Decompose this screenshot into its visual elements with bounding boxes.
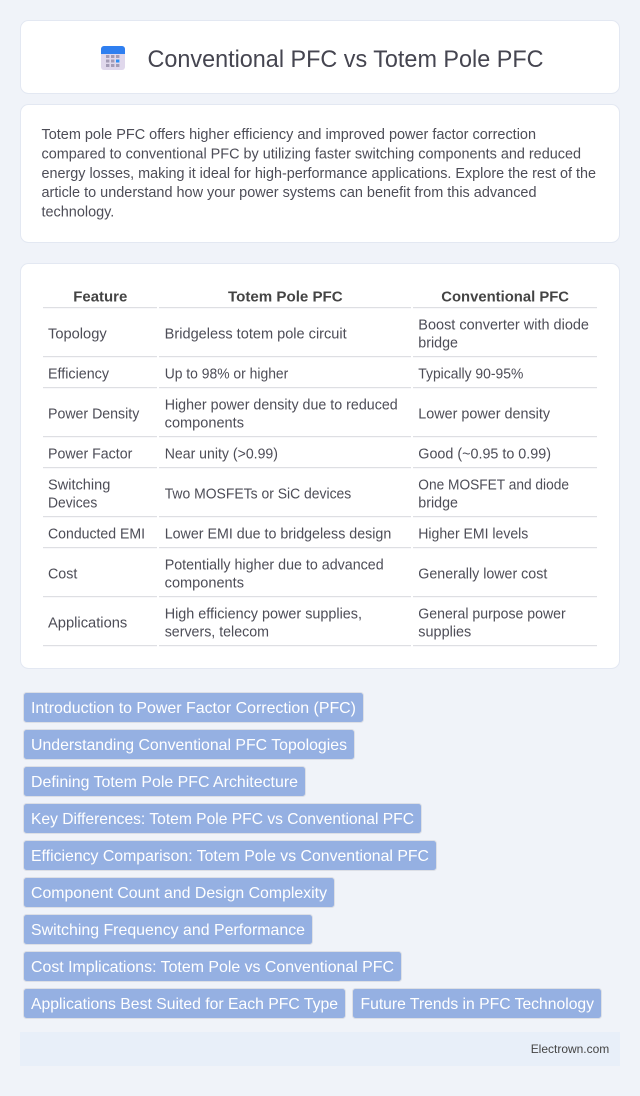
- row: power density: [48, 397, 551, 431]
- row: switching devices: Two MOSFETs or SiC devices: [165, 486, 351, 502]
- text block: introduction paragraph: compared to conventional PFC by utilizing faster switching components and reduced: [42, 146, 581, 162]
- icon: calendar grid: [101, 46, 125, 70]
- row: power factor: Near unity (>0.99): [165, 446, 278, 462]
- row: switching devices: [48, 477, 569, 511]
- tag: cost implications: [24, 952, 402, 982]
- row: conducted EMI: Conducted EMI: [48, 526, 145, 542]
- row: power density: Higher power density due to reduced: [165, 397, 398, 413]
- row: cost: [48, 557, 547, 591]
- row: cost: Potentially higher due to advanced: [165, 557, 384, 573]
- row: cost: components: [165, 575, 244, 591]
- tag: efficiency comparison: [24, 840, 436, 870]
- table header row: Feature: [73, 290, 127, 306]
- row: applications: [48, 606, 566, 640]
- tag: component count: Component Count and Design Complexity: [31, 885, 327, 902]
- tag: introduction: Introduction to Power Factor Correction (PFC): [31, 700, 356, 717]
- tag: switching frequency: Switching Frequency and Performance: [31, 922, 305, 939]
- panel: comparison table: [20, 264, 620, 668]
- row: applications: Applications: [48, 615, 127, 631]
- row: conducted EMI: [48, 526, 528, 542]
- footer credit: Electrown.com: [531, 1042, 609, 1056]
- row: power factor: Power Factor: [48, 446, 132, 462]
- text block: introduction paragraph: [42, 127, 596, 220]
- row: efficiency: Up to 98% or higher: [165, 366, 288, 382]
- row: efficiency: Typically 90-95%: [418, 366, 523, 382]
- row: applications: servers, telecom: [165, 624, 269, 640]
- row: topology: Topology: [48, 326, 108, 342]
- row: conducted EMI: Higher EMI levels: [418, 526, 528, 542]
- text block: introduction paragraph: article to understand how your power systems can benefit from this advanced: [42, 185, 536, 201]
- row: topology: Boost converter with diode: [418, 317, 589, 333]
- row: conducted EMI: Lower EMI due to bridgeless design: [165, 526, 391, 542]
- row: topology: bridge: [418, 335, 458, 351]
- tag: introduction: [24, 692, 364, 722]
- tag: totem pole architecture: [24, 766, 306, 796]
- row: switching devices: One MOSFET and diode: [418, 477, 569, 493]
- row: switching devices: Switching: [48, 477, 110, 493]
- row: applications: General purpose power: [418, 606, 566, 622]
- tag: future trends: Future Trends in PFC Technology: [360, 996, 594, 1013]
- tag: applications: Applications Best Suited for Each PFC Type: [31, 996, 338, 1013]
- table header row: [73, 290, 569, 306]
- row: power factor: Good (~0.95 to 0.99): [418, 446, 551, 462]
- row: topology: [48, 317, 589, 351]
- tag: component count: [24, 878, 334, 908]
- row: efficiency: Efficiency: [48, 366, 110, 382]
- row: power density: components: [165, 415, 244, 431]
- row: efficiency: [48, 366, 523, 382]
- title: Conventional PFC vs Totem Pole PFC: [148, 46, 544, 73]
- row: cost: Cost: [48, 566, 77, 582]
- row: switching devices: Devices: [48, 495, 97, 511]
- row: power density: Power Density: [48, 406, 140, 422]
- tag: conventional topologies: Understanding Conventional PFC Topologies: [31, 737, 347, 754]
- tag: cost implications: Cost Implications: Totem Pole vs Conventional PFC: [31, 959, 394, 976]
- panel: introduction: [20, 104, 620, 242]
- row: applications: High efficiency power supplies,: [165, 606, 362, 622]
- row: power factor: [48, 446, 551, 462]
- tag: applications: [24, 988, 346, 1018]
- tag: future trends: [352, 988, 602, 1018]
- row: topology: Bridgeless totem pole circuit: [165, 326, 347, 342]
- table header row: Conventional PFC: [441, 290, 569, 306]
- text block: introduction paragraph: technology.: [42, 204, 114, 220]
- table header row: Totem Pole PFC: [228, 290, 343, 306]
- section links: [24, 692, 602, 1018]
- row: cost: Generally lower cost: [418, 566, 547, 582]
- tag: key differences: Key Differences: Totem Pole PFC vs Conventional PFC: [31, 811, 414, 828]
- row: switching devices: bridge: [418, 495, 458, 511]
- text block: introduction paragraph: Totem pole PFC offers higher efficiency and improved power factor correction: [42, 127, 536, 143]
- row: power density: Lower power density: [418, 406, 551, 422]
- footer: [20, 1032, 620, 1066]
- text block: introduction paragraph: energy losses, making it ideal for high-performance applications. Explore the rest of the: [42, 166, 596, 182]
- tag: totem pole architecture: Defining Totem Pole PFC Architecture: [31, 774, 298, 791]
- row: applications: supplies: [418, 624, 471, 640]
- tag: key differences: [24, 804, 422, 834]
- tag: conventional topologies: [24, 730, 354, 760]
- tag: efficiency comparison: Efficiency Comparison: Totem Pole vs Conventional PFC: [31, 848, 429, 865]
- panel: title header: [20, 20, 620, 94]
- tag: switching frequency: [24, 914, 312, 944]
